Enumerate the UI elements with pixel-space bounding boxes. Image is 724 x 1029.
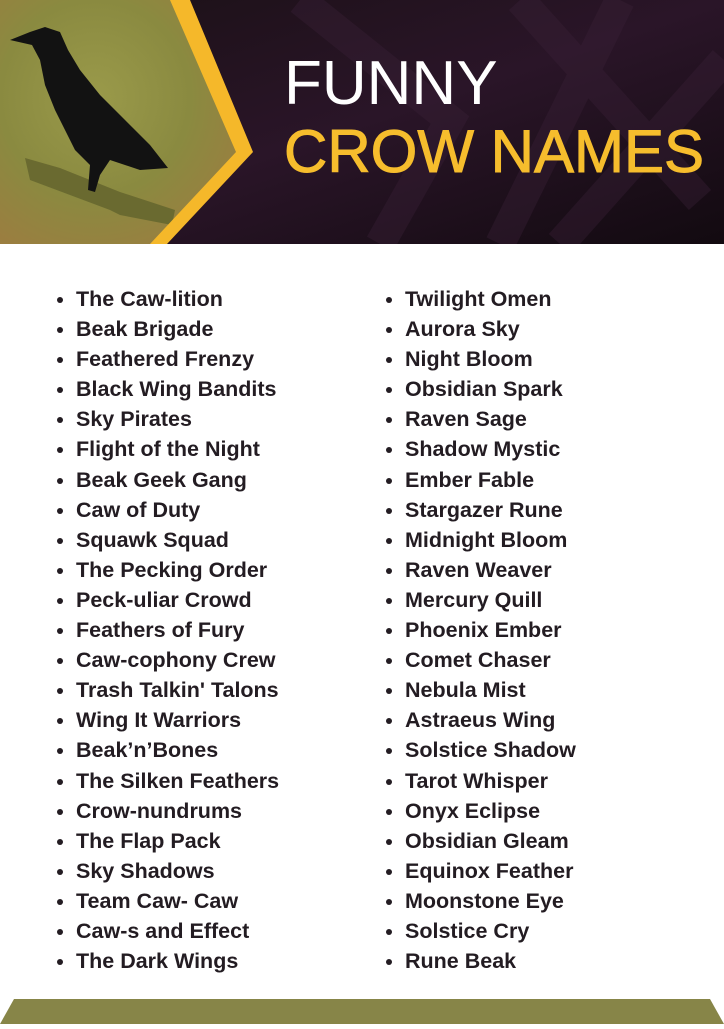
list: right column: Moonstone Eye — [405, 889, 564, 913]
list: right column: Equinox Feather — [405, 859, 573, 883]
list: left column: Feathers of Fury — [76, 618, 244, 642]
list: left column: Wing It Warriors — [76, 708, 241, 732]
list: right column: Solstice Cry — [405, 919, 529, 943]
list: right column: Shadow Mystic — [405, 437, 560, 461]
title — [284, 49, 704, 185]
list: right column: Comet Chaser — [405, 648, 551, 672]
header banner — [0, 0, 724, 244]
list: right column: Twilight Omen — [405, 287, 552, 311]
list: left column: Flight of the Night — [76, 437, 260, 461]
list: right column: Astraeus Wing — [405, 708, 555, 732]
list: left column: Sky Pirates — [76, 407, 192, 431]
list: right column: Tarot Whisper — [405, 768, 548, 792]
list: right column: Solstice Shadow — [405, 738, 576, 762]
list: left column: Sky Shadows — [76, 859, 215, 883]
title: FUNNY — [284, 49, 498, 118]
list: right column: Onyx Eclipse — [405, 799, 540, 823]
list: right column: Ember Fable — [405, 468, 534, 492]
list: right column: Nebula Mist — [405, 678, 526, 702]
list: left column: Feathered Frenzy — [76, 347, 254, 371]
photo: crow — [0, 0, 238, 244]
list: right column: Mercury Quill — [405, 588, 542, 612]
list: left column: The Dark Wings — [76, 949, 238, 973]
title: CROW NAMES — [284, 118, 704, 185]
list: left column: Squawk Squad — [76, 528, 229, 552]
list: left column: Caw of Duty — [76, 498, 200, 522]
list: right column: Obsidian Spark — [405, 377, 563, 401]
list: left column: Beak Brigade — [76, 317, 213, 341]
list: right column: Raven Weaver — [405, 558, 552, 582]
list: right column: Aurora Sky — [405, 317, 520, 341]
list: left column: Crow-nundrums — [76, 799, 242, 823]
list: right column: Night Bloom — [405, 347, 533, 371]
chevron stripe — [150, 0, 253, 244]
list: left column: Caw-cophony Crew — [76, 648, 276, 672]
list: left column: Team Caw- Caw — [76, 889, 238, 913]
list: left column: The Flap Pack — [76, 829, 221, 853]
list: left column: The Caw-lition — [76, 287, 223, 311]
list: left column: Beak Geek Gang — [76, 468, 247, 492]
list: right column: Stargazer Rune — [405, 498, 563, 522]
list: left column: Trash Talkin' Talons — [76, 678, 279, 702]
list: left column — [57, 287, 279, 973]
footer bar — [0, 999, 724, 1024]
list: left column: Beak’n’Bones — [76, 738, 218, 762]
list: right column — [386, 287, 576, 973]
list: right column: Raven Sage — [405, 407, 527, 431]
list: left column: Caw-s and Effect — [76, 919, 249, 943]
list: left column: Black Wing Bandits — [76, 377, 277, 401]
list: left column: The Silken Feathers — [76, 768, 279, 792]
list: right column: Midnight Bloom — [405, 528, 567, 552]
list: right column: Rune Beak — [405, 949, 516, 973]
list: left column: The Pecking Order — [76, 558, 267, 582]
list: left column: Peck-uliar Crowd — [76, 588, 252, 612]
list: right column: Obsidian Gleam — [405, 829, 569, 853]
list: right column: Phoenix Ember — [405, 618, 562, 642]
